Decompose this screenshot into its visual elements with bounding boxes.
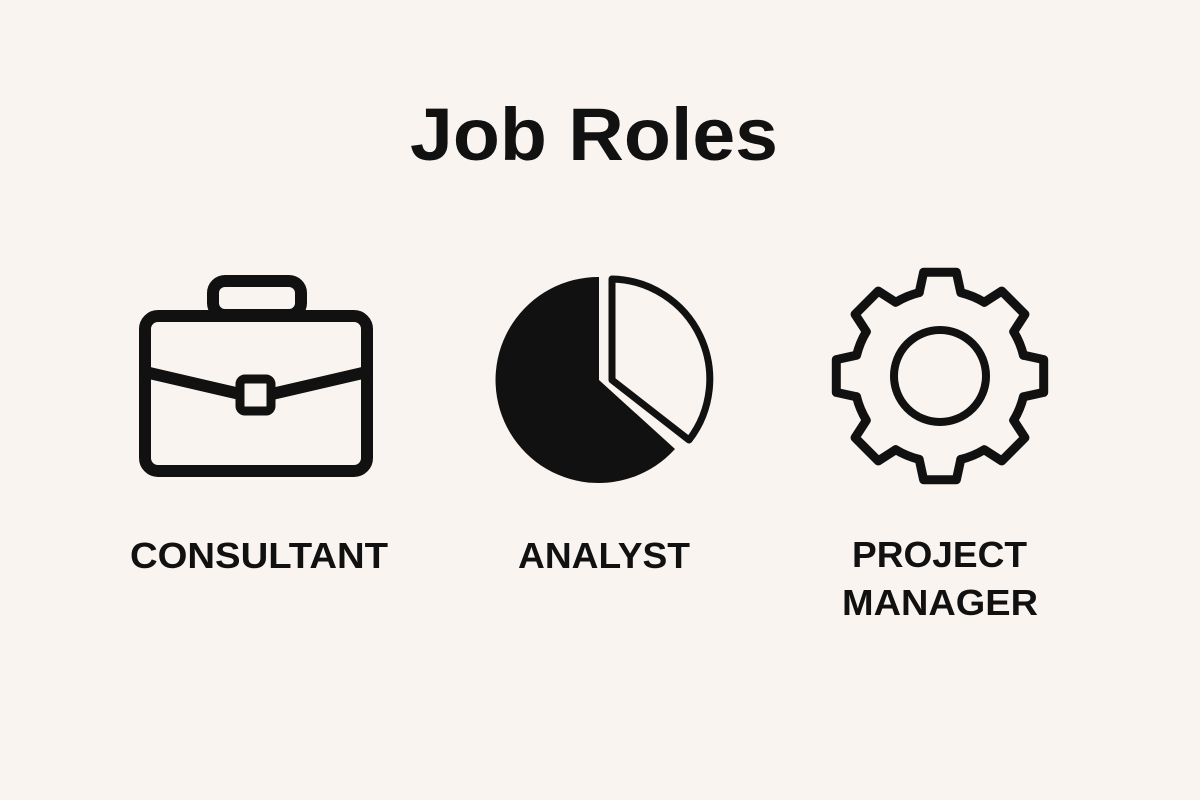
label: analyst: ANALYST (518, 535, 690, 576)
label: consultant: CONSULTANT (130, 535, 388, 576)
icon: pie chart (496, 277, 710, 483)
icon: gear (835, 271, 1045, 481)
title: Job Roles (410, 93, 778, 176)
icon: briefcase (145, 281, 367, 471)
label: project manager (842, 534, 1038, 623)
label: project manager: MANAGER (842, 582, 1038, 623)
label: project manager: PROJECT (852, 534, 1027, 575)
